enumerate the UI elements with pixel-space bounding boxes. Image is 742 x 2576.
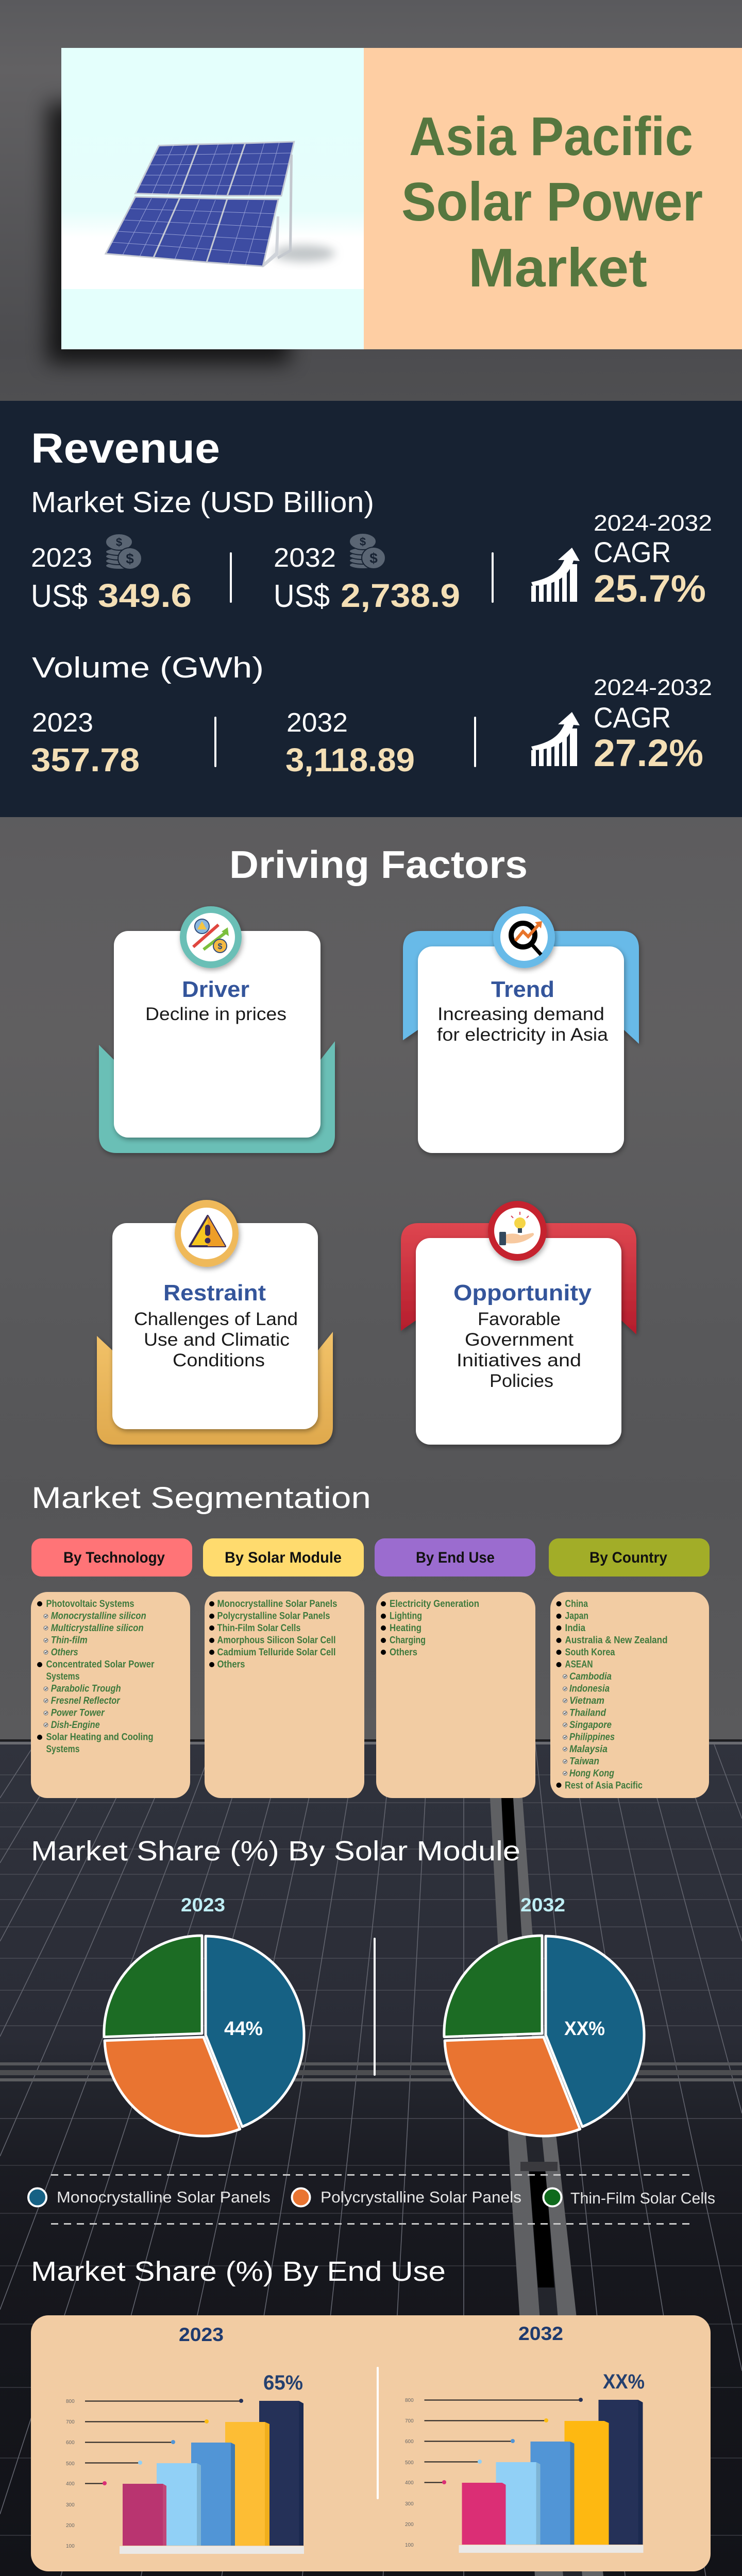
bar chart: 2032: 700: [405, 2418, 414, 2424]
heading: market share by end use: Market Share (%) By End Use: [31, 2256, 446, 2287]
list: technology: Monocrystalline silicon: [51, 1611, 146, 1622]
stat: volume CAGR: 27.2%: [594, 732, 703, 774]
hero banner: [47, 48, 742, 363]
icon: coins: $: [126, 551, 134, 567]
list: country: Indonesia: [569, 1684, 610, 1694]
text: opportunity: Policies: [490, 1371, 553, 1391]
title: [401, 106, 703, 298]
list: end use: [376, 1592, 535, 1798]
bar chart: 2023: [66, 2324, 304, 2554]
list: country: Vietnam: [569, 1696, 604, 1706]
list: technology: Concentrated Solar Power: [46, 1659, 155, 1670]
title: Asia Pacific: [409, 106, 693, 167]
list: technology: Solar Heating and Cooling: [46, 1732, 154, 1742]
pie chart: 2023: 44%: [224, 2018, 263, 2040]
list: technology: Thin-film: [51, 1635, 88, 1646]
panel: revenue: [0, 401, 742, 817]
panel: end use charts: [31, 2315, 711, 2571]
hero shadow: [47, 103, 290, 363]
list: end use: Others: [390, 1647, 417, 1658]
legend: solar module: [28, 2188, 715, 2207]
icon: market arrows and gears: $: [218, 942, 223, 951]
icon: coins: $: [360, 535, 366, 548]
stat: 2023 volume: 2023: [32, 708, 93, 738]
panel: restraint: [97, 1200, 333, 1445]
heading: market size: Market Size (USD Billion): [31, 486, 374, 519]
heading: market segmentation: Market Segmentation: [31, 1481, 371, 1515]
list: solar module: Others: [217, 1659, 245, 1670]
text: trend: for electricity in Asia: [437, 1025, 609, 1045]
header pill: by technology: [31, 1538, 192, 1577]
hero image panel: [61, 48, 364, 349]
stat: revenue CAGR: [594, 511, 712, 610]
text: restraint: [134, 1309, 298, 1370]
stat: 2023 revenue: [31, 543, 192, 614]
bar chart: 2023: 100: [66, 2544, 75, 2549]
bar chart: 2032: [405, 2323, 645, 2553]
icon: coins: [106, 534, 142, 569]
list: country: India: [565, 1623, 585, 1634]
list: solar module: Amorphous Silicon Solar Cell: [217, 1635, 336, 1646]
text: opportunity: Government: [465, 1330, 574, 1350]
list: solar module: Polycrystalline Solar Panels: [217, 1611, 330, 1622]
title: Solar Power: [401, 172, 703, 232]
list: country: Malaysia: [569, 1744, 608, 1755]
bar chart: 2023: 400: [66, 2481, 75, 2487]
panel: by end use: By End Use: [416, 1549, 495, 1566]
panel: driver: [99, 906, 335, 1153]
stat: 2023 volume: [31, 708, 140, 778]
bar chart: 2032: 400: [405, 2480, 414, 2486]
list: technology: Systems: [46, 1671, 79, 1682]
text: restraint: Use and Climatic: [144, 1330, 290, 1350]
bar chart: 2023: 800: [66, 2399, 75, 2404]
list: country: ASEAN: [565, 1659, 593, 1670]
list: end use: Electricity Generation: [390, 1599, 479, 1609]
stat: 2023 revenue: US$: [31, 579, 88, 614]
header pill: by country: [549, 1538, 710, 1577]
icon: warning triangle: [190, 1216, 225, 1246]
icon: hand with light bulb: [499, 1212, 534, 1245]
list: solar module: Thin-Film Solar Cells: [217, 1623, 301, 1634]
bar chart: 2023: 500: [66, 2461, 75, 2467]
heading: driving factors: Driving Factors: [229, 843, 528, 886]
icon: market arrows and gears: [193, 919, 229, 953]
heading: driver: Driver: [182, 977, 249, 1002]
list: technology: Parabolic Trough: [51, 1684, 121, 1694]
list: solar module: [205, 1591, 364, 1798]
heading: volume: Volume (GWh): [32, 651, 264, 684]
hero title panel: [364, 48, 742, 349]
list: technology: Systems: [46, 1744, 79, 1755]
heading: market share by solar module: Market Share (%) By Solar Module: [31, 1836, 520, 1867]
list: country: Philippines: [569, 1732, 615, 1742]
stat: 2032 volume: 2032: [286, 708, 348, 738]
stat: 2032 volume: [285, 708, 415, 778]
list: country: Singapore: [569, 1720, 612, 1731]
list: solar module: Monocrystalline Solar Panels: [217, 1599, 337, 1609]
bar chart: 2032: 2032: [518, 2323, 563, 2344]
title: Market: [468, 238, 647, 298]
bar chart: 2023: 65%: [263, 2371, 303, 2394]
stat: revenue CAGR: 2024-2032: [594, 511, 712, 536]
list: technology: Dish-Engine: [51, 1720, 100, 1731]
bar chart: 2023: 300: [66, 2502, 75, 2508]
legend: solar module: Thin-Film Solar Cells: [570, 2189, 715, 2207]
bar chart: 2032: 300: [405, 2501, 414, 2507]
heading: trend: Trend: [491, 977, 554, 1002]
list: end use: Heating: [390, 1623, 421, 1634]
panel: trend: [403, 906, 639, 1153]
text: trend: [437, 1004, 609, 1045]
bar chart: 2032: 100: [405, 2543, 414, 2548]
text: opportunity: Initiatives and: [457, 1350, 581, 1370]
list: technology: Power Tower: [51, 1707, 105, 1719]
pie chart: 2032: [444, 1894, 644, 2136]
icon: coins: [349, 533, 385, 569]
list: technology: Photovoltaic Systems: [46, 1599, 134, 1609]
bar chart: 2032: 500: [405, 2460, 414, 2466]
stat: volume CAGR: CAGR: [594, 701, 671, 734]
list: technology: [31, 1592, 190, 1798]
list: country: South Korea: [565, 1647, 615, 1658]
legend: solar module: Monocrystalline Solar Panels: [57, 2188, 271, 2206]
panel: by country: [549, 1538, 710, 1798]
bar chart: 2023: 700: [66, 2419, 75, 2425]
list: country: Cambodia: [569, 1671, 612, 1682]
list: technology: Multicrystalline silicon: [51, 1623, 144, 1634]
stat: 2032 revenue: US$: [274, 579, 330, 614]
pie chart: 2023: [104, 1894, 304, 2136]
icon: magnifier with trend arrow: [511, 921, 542, 955]
panel: by end use: [375, 1538, 535, 1798]
stat: revenue CAGR: 25.7%: [594, 567, 706, 610]
bar chart: 2032: 800: [405, 2398, 414, 2403]
stat: 2032 revenue: 2,738.9: [341, 577, 460, 614]
list: end use: Charging: [390, 1635, 426, 1646]
text: restraint: Challenges of Land: [134, 1309, 298, 1329]
stat: 2032 revenue: 2032: [274, 543, 336, 573]
icon: solar panel: [106, 142, 335, 267]
stat: 2023 revenue: 349.6: [98, 577, 192, 614]
bar chart: 2032: 200: [405, 2522, 414, 2528]
panel: opportunity: [401, 1201, 636, 1445]
panel: by technology: By Technology: [63, 1549, 165, 1566]
pie chart: 2023: 2023: [181, 1894, 225, 1916]
icon: growth arrow: [531, 712, 580, 766]
list: country: Taiwan: [569, 1756, 599, 1767]
panel: by solar module: [203, 1538, 364, 1798]
panel: by country: By Country: [589, 1549, 667, 1566]
list: end use: Lighting: [390, 1611, 422, 1622]
list: technology: Fresnel Reflector: [51, 1696, 121, 1706]
list: technology: Others: [51, 1647, 78, 1658]
list: country: [550, 1592, 709, 1798]
panel: by technology: [31, 1538, 192, 1798]
bar chart: 2023: 2023: [179, 2324, 224, 2345]
icon: coins: $: [116, 536, 122, 549]
stat: 2032 volume: 3,118.89: [285, 741, 415, 778]
legend: solar module: Polycrystalline Solar Panels: [321, 2188, 521, 2206]
text: trend: Increasing demand: [437, 1004, 604, 1024]
bar chart: 2032: XX%: [603, 2370, 645, 2393]
list: country: Australia & New Zealand: [565, 1635, 668, 1646]
list: solar module: Cadmium Telluride Solar Cell: [217, 1647, 336, 1658]
text: opportunity: [457, 1309, 581, 1391]
heading: opportunity: Opportunity: [453, 1280, 592, 1306]
stat: revenue CAGR: CAGR: [594, 536, 671, 568]
bar chart: 2032: 600: [405, 2439, 414, 2445]
bar chart: 2023: 200: [66, 2523, 75, 2529]
stat: volume CAGR: 2024-2032: [594, 675, 712, 700]
pie chart: 2032: 2032: [520, 1894, 565, 1916]
list: country: China: [565, 1599, 588, 1609]
icon: growth arrow: [531, 548, 580, 602]
header pill: by end use: [375, 1538, 535, 1577]
stat: 2023 revenue: 2023: [31, 543, 92, 573]
heading: revenue: Revenue: [31, 425, 220, 472]
list: country: Rest of Asia Pacific: [565, 1781, 643, 1791]
panel: by solar module: By Solar Module: [225, 1549, 342, 1566]
list: country: Japan: [565, 1611, 588, 1622]
text: restraint: Conditions: [173, 1350, 265, 1370]
list: country: Hong Kong: [569, 1768, 614, 1779]
text: driver: Decline in prices: [145, 1004, 286, 1024]
list: country: Thailand: [569, 1707, 606, 1719]
text: opportunity: Favorable: [478, 1309, 561, 1329]
bar chart: 2023: 600: [66, 2440, 75, 2446]
pie chart: 2032: XX%: [564, 2018, 605, 2040]
heading: restraint: Restraint: [163, 1280, 266, 1306]
stat: 2032 revenue: [274, 543, 460, 614]
stat: 2023 volume: 357.78: [31, 741, 140, 778]
stat: volume CAGR: [594, 675, 712, 774]
header pill: by solar module: [203, 1538, 364, 1577]
icon: coins: $: [369, 550, 378, 566]
